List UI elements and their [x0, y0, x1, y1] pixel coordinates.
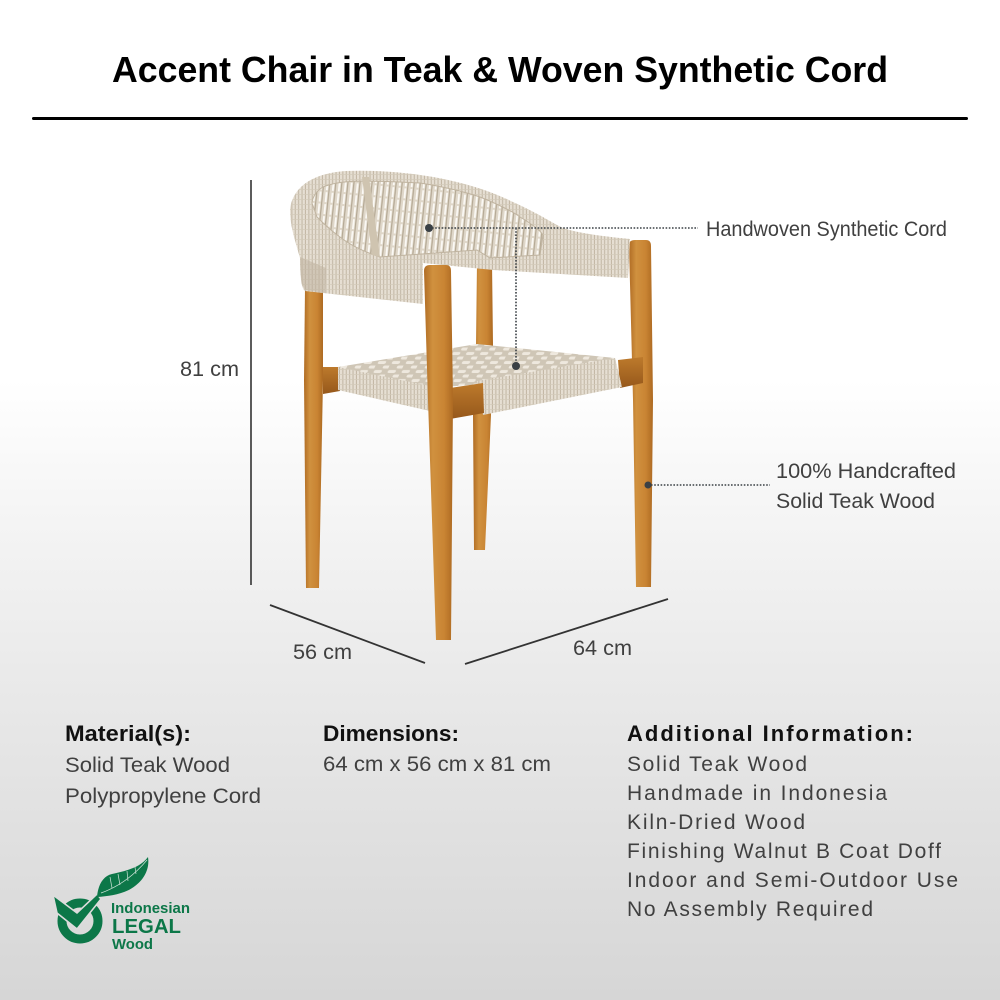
backrest: [290, 171, 630, 304]
logo ring: [62, 903, 98, 939]
seat right band: [477, 358, 622, 415]
backrest left shadow: [300, 257, 326, 293]
right seat rail: [618, 357, 643, 388]
title: Accent Chair in Teak & Woven Synthetic Cord: [112, 49, 888, 90]
additional information block: Handmade in Indonesia: [627, 782, 887, 805]
callout: solid teak wood: [644, 460, 956, 513]
callout: handwoven synthetic cord: [425, 218, 947, 370]
dimensions block: 64 cm x 56 cm x 81 cm: [323, 753, 551, 776]
width dimension: [465, 599, 668, 664]
callout: solid teak wood: 100% Handcrafted: [776, 460, 956, 483]
height dimension: 81 cm: [180, 358, 239, 381]
logo: Indonesian Legal Wood: Wood: [112, 937, 153, 953]
additional information block: Additional Information:: [627, 721, 913, 746]
callout: handwoven synthetic cord: Handwoven Synthetic Cord: [706, 218, 947, 241]
logo: Indonesian Legal Wood: [53, 857, 190, 953]
dimensions block: [323, 721, 551, 776]
dimensions block: Dimensions:: [323, 721, 459, 746]
additional information block: Indoor and Semi-Outdoor Use: [627, 869, 958, 892]
front leg: [424, 265, 453, 640]
depth dimension: [270, 605, 425, 664]
logo: Indonesian Legal Wood: Indonesian: [111, 900, 190, 917]
materials block: Solid Teak Wood: [65, 754, 230, 777]
backrest open weave: [312, 181, 543, 258]
back centre leg: [473, 262, 493, 550]
logo check mark: [53, 894, 101, 929]
seat left band: [338, 367, 430, 411]
additional information block: [627, 721, 958, 921]
seat top: [338, 344, 615, 388]
backrest vertical seam: [362, 177, 380, 257]
depth dimension: 56 cm: [293, 641, 352, 664]
chair illustration: [290, 171, 653, 640]
materials block: [65, 721, 261, 808]
right leg: [629, 240, 653, 587]
materials block: Material(s):: [65, 721, 191, 746]
logo leaf: [97, 857, 148, 897]
additional information block: Solid Teak Wood: [627, 753, 807, 776]
materials block: Polypropylene Cord: [65, 785, 261, 808]
back left leg: [304, 288, 323, 588]
additional information block: Kiln-Dried Wood: [627, 811, 805, 834]
title rule: [32, 117, 968, 120]
additional information block: No Assembly Required: [627, 898, 873, 921]
width dimension: 64 cm: [573, 637, 632, 660]
logo leaf veins: [101, 860, 147, 893]
callout: solid teak wood: Solid Teak Wood: [776, 490, 935, 513]
additional information block: Finishing Walnut B Coat Doff: [627, 840, 941, 863]
left seat rail: [323, 367, 340, 394]
front corner rail: [450, 383, 484, 419]
logo: Indonesian Legal Wood: LEGAL: [112, 915, 181, 938]
